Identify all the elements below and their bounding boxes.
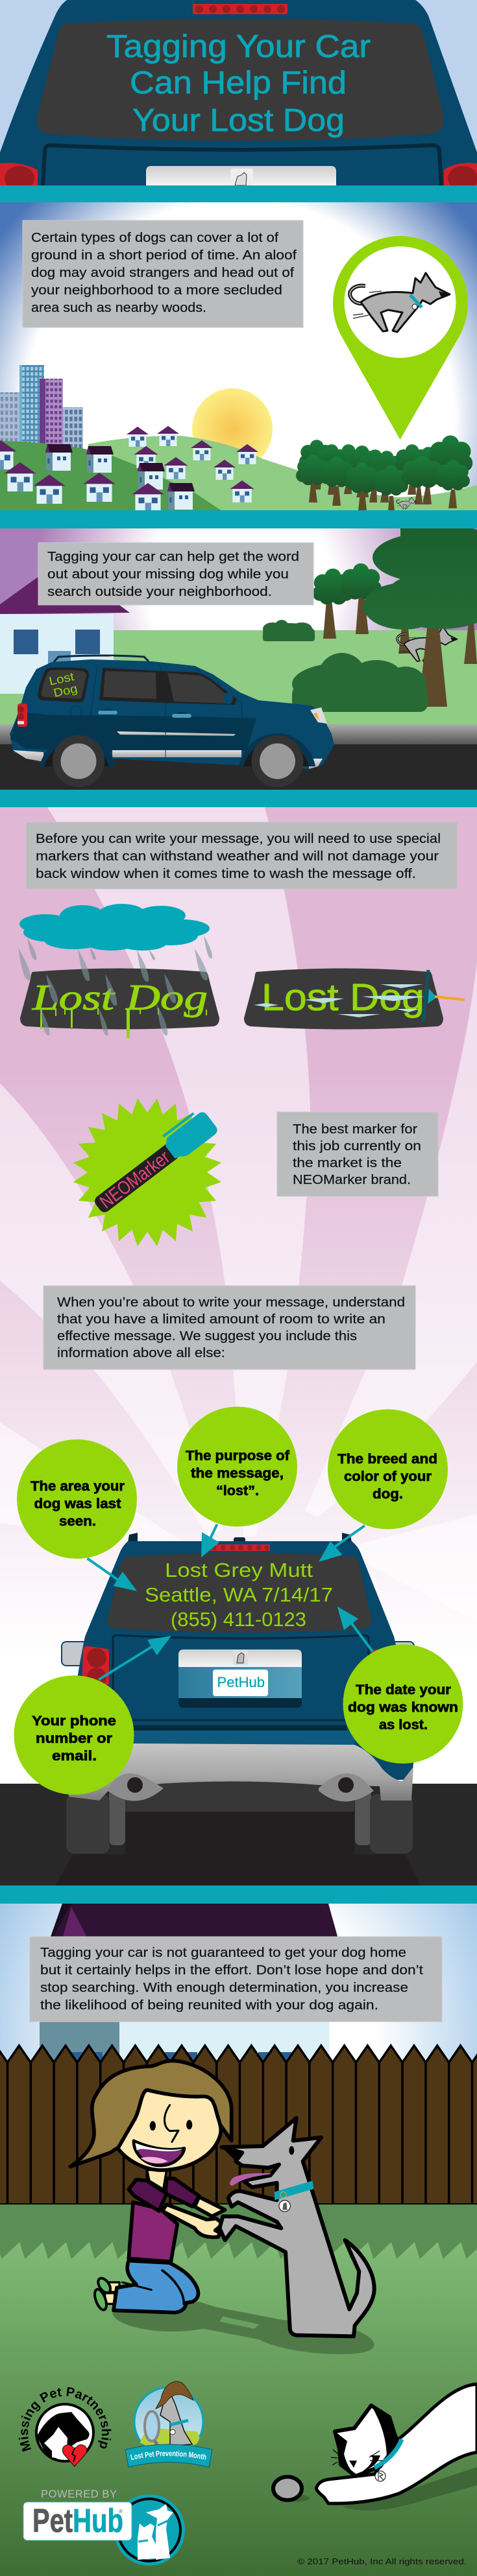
callout: breed: The breed and bbox=[337, 1452, 437, 1467]
text block: the likelihood of being reunited with your dog again. bbox=[40, 1998, 378, 2013]
arrow: phone bbox=[99, 1636, 171, 1680]
tail lights bbox=[82, 1646, 397, 1687]
text block: limited room bbox=[43, 1286, 415, 1369]
window with message: Seattle, WA 7/14/17 bbox=[145, 1583, 333, 1606]
icon: rain window with dripping text bbox=[18, 904, 219, 1038]
lawn bbox=[0, 2204, 477, 2576]
callout: date: dog was known bbox=[348, 1700, 458, 1715]
text block: limited room: effective message. We suggest you include this bbox=[57, 1329, 357, 1343]
roof bumps bbox=[128, 1533, 352, 1542]
tail lights bbox=[0, 163, 477, 191]
text block: but it certainly helps in the effort. Don’t lose hope and don’t bbox=[40, 1963, 423, 1978]
text block: best marker bbox=[277, 1112, 438, 1196]
dripping Lost Dog: Lost Dog bbox=[32, 978, 208, 1018]
street bbox=[0, 724, 477, 790]
side view car bbox=[10, 656, 334, 787]
window with message bbox=[108, 1552, 371, 1633]
text block: dog may avoid strangers and head out of bbox=[31, 266, 294, 280]
callout: breed: color of your bbox=[344, 1469, 432, 1484]
banner: Lost Pet Prevention Month bbox=[130, 2451, 206, 2460]
back arm bbox=[195, 2197, 225, 2216]
icon: broken heart bbox=[62, 2445, 87, 2466]
window with message: (855) 411-0123 bbox=[171, 1608, 306, 1631]
logo: Powered by PetHub: POWERED BY bbox=[41, 2488, 117, 2500]
text block: limited room: that you have a limited amount of room to write an bbox=[57, 1312, 385, 1327]
text block: your neighborhood to a more secluded bbox=[31, 283, 282, 298]
callout: phone: Your phone bbox=[32, 1714, 116, 1729]
mouth bbox=[134, 2141, 184, 2166]
text block: search outside your neighborhood. bbox=[47, 585, 272, 599]
callout: date bbox=[343, 1644, 463, 1764]
trunk outline bbox=[43, 145, 441, 186]
icon: NEOMarker on starburst bbox=[73, 1098, 221, 1246]
brake light bbox=[193, 4, 287, 14]
logo: Powered by PetHub bbox=[23, 2488, 185, 2566]
text block: limited room: When you’re about to write your message, understand bbox=[57, 1295, 405, 1310]
callout: phone: email. bbox=[52, 1749, 97, 1764]
sunburst background bbox=[0, 807, 477, 1885]
text block: limited room: information above all else: bbox=[57, 1346, 225, 1360]
sleeves bbox=[165, 2179, 199, 2206]
license plate bbox=[146, 166, 336, 188]
text block: best marker: the market is the bbox=[293, 1156, 402, 1170]
panel: dogs can cover ground bbox=[0, 186, 477, 512]
text block: Tagging your car can help get the word bbox=[47, 550, 299, 564]
title: Tagging Your Car bbox=[106, 29, 371, 64]
house bbox=[40, 1904, 338, 2081]
callout: breed: dog. bbox=[373, 1487, 403, 1502]
text block: best marker: The best marker for bbox=[293, 1122, 417, 1137]
logo: Lost Pet Prevention Month bbox=[125, 2381, 213, 2468]
text block bbox=[23, 220, 303, 327]
text block: ground in a short period of time. An aloof bbox=[31, 248, 297, 263]
arrow: area bbox=[87, 1559, 137, 1591]
road bbox=[0, 1784, 477, 1885]
callout: date: as lost. bbox=[379, 1718, 428, 1732]
rear quarter window with Lost Dog: Dog bbox=[53, 682, 79, 700]
license plate: PetHub bbox=[217, 1674, 265, 1690]
icon: window being wiped bbox=[244, 969, 465, 1030]
panel: hero with rear of car bbox=[0, 0, 477, 191]
callout: area: seen. bbox=[59, 1514, 96, 1529]
callout: breed bbox=[328, 1410, 448, 1529]
side mirrors bbox=[62, 1642, 414, 1666]
side windows bbox=[99, 668, 237, 705]
copyright: © 2017 PetHub, Inc All rights reserved. bbox=[297, 2557, 467, 2566]
trunk lines bbox=[113, 1635, 369, 1728]
dog bbox=[219, 2118, 374, 2336]
title: Can Help Find bbox=[130, 65, 347, 100]
icon: pet badge bbox=[114, 2494, 185, 2566]
face bbox=[118, 2090, 221, 2170]
text block bbox=[30, 1937, 442, 2022]
arrow: purpose bbox=[201, 1524, 219, 1557]
logo: Powered by PetHub: Hub bbox=[73, 2502, 123, 2539]
rear quarter window with Lost Dog bbox=[38, 667, 89, 702]
logo: Powered by PetHub: ® bbox=[119, 2509, 123, 2514]
cat bbox=[316, 2384, 477, 2511]
callout: phone bbox=[14, 1675, 134, 1795]
rear quarter window with Lost Dog: Lost bbox=[48, 670, 75, 688]
text block: out about your missing dog while you bbox=[47, 567, 289, 582]
logo: Missing Pet Partnership: Missing Pet Partnership bbox=[18, 2387, 112, 2452]
callout: area: The area your bbox=[31, 1479, 125, 1494]
arrows bbox=[87, 1524, 373, 1680]
panel: markers and message bbox=[0, 807, 477, 1885]
map pin with dog bbox=[333, 236, 468, 440]
callout: area bbox=[17, 1439, 137, 1559]
text block: best marker: NEOMarker brand. bbox=[293, 1173, 411, 1187]
callout: date: The date your bbox=[356, 1683, 451, 1697]
handles bbox=[98, 709, 191, 720]
rear window bbox=[37, 19, 444, 141]
callout: purpose: The purpose of bbox=[186, 1448, 290, 1463]
text block: area such as nearby woods. bbox=[31, 301, 206, 315]
underbody, tires and bumper bbox=[66, 1743, 413, 1854]
callout: purpose: “lost”. bbox=[216, 1483, 259, 1498]
arrow: date bbox=[337, 1607, 373, 1651]
cloud bbox=[19, 904, 210, 951]
text block: Tagging your car is not guaranteed to get your dog home bbox=[40, 1946, 406, 1960]
dripping Lost Dog bbox=[32, 978, 208, 1038]
shadow bbox=[112, 2302, 374, 2354]
house bbox=[0, 558, 130, 694]
person and dog bbox=[70, 2061, 374, 2354]
window with message: Lost Grey Mutt bbox=[165, 1559, 313, 1581]
text block: Certain types of dogs can cover a lot of bbox=[31, 231, 278, 245]
lawn bbox=[0, 630, 477, 725]
sun bbox=[192, 388, 273, 470]
background trees and bushes bbox=[263, 526, 477, 712]
ball bbox=[273, 2477, 310, 2502]
title: Your Lost Dog bbox=[132, 103, 345, 138]
hills bbox=[0, 436, 477, 511]
panel: reunited bbox=[0, 1904, 477, 2576]
icon: window being wiped: Lost Dog bbox=[262, 976, 424, 1019]
text block: stop searching. With enough determination, you increase bbox=[40, 1981, 408, 1995]
shirt bbox=[128, 2203, 177, 2262]
rear view car bbox=[62, 1533, 414, 1854]
arrow: breed bbox=[319, 1526, 365, 1562]
brake light bbox=[210, 1544, 270, 1551]
text block: special markers: Before you can write your message, you will need to use special bbox=[36, 832, 441, 846]
icon: magnifier bbox=[145, 2411, 159, 2446]
logo: Powered by PetHub: Pet bbox=[32, 2502, 73, 2539]
tail light bbox=[18, 703, 27, 727]
rain drops bbox=[18, 936, 212, 1035]
feet bbox=[108, 2282, 119, 2292]
dog detective bbox=[156, 2381, 193, 2446]
text block bbox=[38, 543, 313, 605]
text block: best marker: this job currently on bbox=[293, 1139, 421, 1153]
text block: special markers: markers that can withstand weather and will not damage your bbox=[36, 849, 439, 864]
text block: special markers: back window when it comes time to wash the message off. bbox=[36, 867, 416, 881]
headlight bbox=[310, 707, 327, 724]
teal divider bands bbox=[0, 185, 477, 1904]
fence bbox=[0, 2046, 477, 2204]
wheels bbox=[40, 733, 315, 787]
hair bbox=[70, 2061, 232, 2167]
jeans bbox=[114, 2261, 198, 2313]
neck bbox=[147, 2170, 167, 2190]
person bbox=[70, 2061, 232, 2313]
callout: area: dog was last bbox=[34, 1496, 121, 1511]
skyline bbox=[0, 365, 83, 450]
panel: get the word out bbox=[0, 526, 477, 790]
forest bbox=[296, 436, 472, 511]
callout: purpose bbox=[177, 1407, 297, 1526]
houses bbox=[0, 426, 258, 512]
icon: NEOMarker on starburst: NEOMarker bbox=[96, 1147, 174, 1213]
text block: special markers bbox=[26, 822, 458, 889]
callout: phone: number or bbox=[36, 1731, 112, 1746]
license plate bbox=[178, 1649, 302, 1708]
title bbox=[106, 29, 371, 138]
callout: purpose: the message, bbox=[191, 1466, 284, 1481]
car body rear bbox=[0, 0, 477, 186]
